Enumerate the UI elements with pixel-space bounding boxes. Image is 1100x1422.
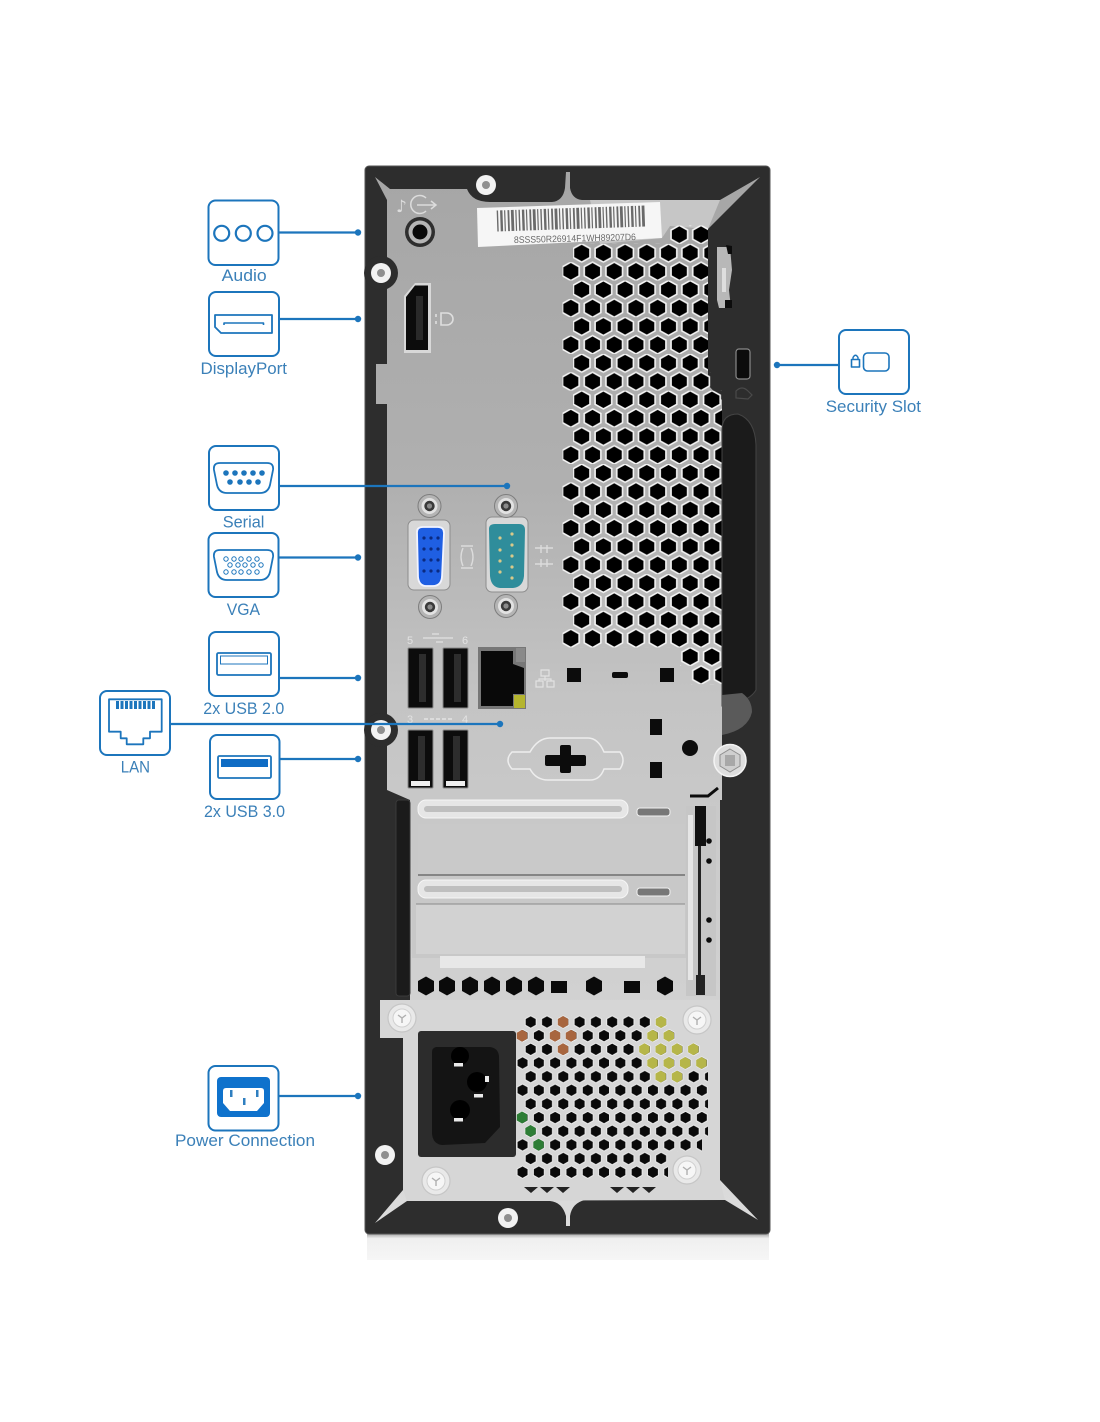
USB number marks — [407, 634, 468, 726]
dot: Serial — [504, 483, 510, 489]
serial marking — [535, 545, 553, 567]
slot side rail — [686, 788, 718, 996]
bottom tabs — [524, 1187, 656, 1193]
callout: USB 2.0 — [203, 632, 361, 718]
label: Serial: Serial — [223, 512, 264, 532]
dot: Power — [355, 1093, 361, 1099]
icon box: Power — [208, 1066, 278, 1130]
connector line: USB 2.0 — [279, 677, 358, 679]
security lock slot — [736, 349, 750, 379]
DisplayPort port — [404, 283, 431, 353]
LAN port — [478, 647, 526, 709]
connector line: VGA — [279, 556, 358, 559]
icon: lock and slot — [852, 353, 889, 371]
connector line: Security — [777, 364, 839, 366]
power supply screws — [388, 1004, 711, 1195]
power supply plate — [380, 1000, 725, 1201]
icon box: Security — [839, 330, 909, 394]
callout: VGA — [208, 533, 361, 619]
dot: USB 3.0 — [355, 756, 361, 762]
callout: Audio — [208, 200, 361, 285]
icon: three audio jacks — [214, 226, 272, 241]
icon box: DisplayPort — [209, 292, 279, 356]
icon: USB 2.0 connector — [217, 653, 271, 675]
connector line: USB 3.0 — [279, 758, 358, 760]
callout: USB 3.0 — [204, 735, 361, 821]
connector line: Serial — [279, 485, 507, 487]
callout: DisplayPort — [200, 292, 361, 378]
callout: LAN — [100, 691, 503, 777]
floor shadow under computer — [367, 1233, 769, 1260]
label: DisplayPort: DisplayPort — [200, 359, 287, 378]
right side handle recess — [722, 414, 756, 706]
metal back plate — [375, 172, 760, 1226]
audio marking: ♪ — [396, 197, 407, 217]
label: 2x USB 3.0: 2x USB 3.0 — [204, 802, 285, 821]
label: VGA: VGA — [227, 600, 261, 619]
USB 3.0 ports — [408, 730, 468, 788]
LAN marking — [536, 670, 554, 687]
dot: Security — [774, 362, 780, 368]
icon box: USB 2.0 — [209, 632, 279, 696]
expansion slots — [412, 798, 692, 968]
icon box: LAN — [100, 691, 170, 755]
serial port — [486, 494, 528, 618]
USB number marks: 6 — [462, 635, 468, 647]
DisplayPort marking — [436, 313, 453, 325]
USB 2.0 ports — [408, 648, 468, 708]
VGA port — [408, 494, 450, 618]
connector line: Power — [279, 1095, 358, 1097]
top right latch — [717, 245, 732, 308]
power supply grille — [516, 1015, 708, 1179]
left lower slot recess — [396, 800, 410, 996]
computer rear photo illustration — [364, 166, 770, 1234]
icon box: VGA — [208, 533, 278, 597]
icon: VGA connector — [214, 550, 273, 580]
connector line: Audio — [279, 231, 358, 234]
dot: DisplayPort — [355, 316, 361, 322]
USB number marks: 4 — [462, 714, 468, 726]
hex thumbscrew — [714, 744, 746, 776]
dot: LAN — [497, 721, 503, 727]
screw rings — [371, 175, 518, 1228]
dot: VGA — [355, 554, 361, 561]
icon box: Serial — [209, 446, 279, 510]
upper ventilation grille — [562, 226, 722, 684]
icon box: Audio — [208, 200, 278, 265]
light patch above grille — [590, 200, 720, 244]
audio jack — [405, 217, 435, 247]
label: Audio: Audio — [222, 266, 267, 285]
plate holes — [567, 668, 698, 778]
icon: USB 3.0 connector — [218, 756, 271, 778]
label: Security Slot: Security Slot — [826, 397, 921, 416]
dot: Audio — [355, 229, 361, 236]
handle bottom highlight — [722, 693, 752, 735]
label: LAN: LAN — [121, 758, 150, 777]
callout: Security Slot — [774, 330, 921, 416]
audio marking — [396, 195, 436, 217]
icon: serial connector — [214, 463, 273, 493]
dot: USB 2.0 — [355, 675, 361, 681]
mounting bumps — [364, 256, 398, 747]
label: Power Connection: Power Connection — [175, 1131, 315, 1150]
VGA marking — [461, 546, 473, 568]
icon: power socket — [217, 1077, 270, 1117]
connector line: DisplayPort — [279, 318, 358, 320]
callout: Power Connection — [175, 1066, 361, 1150]
USB number marks: 5 — [407, 635, 413, 647]
icon box: USB 3.0 — [210, 735, 280, 799]
icon: DisplayPort connector — [215, 315, 272, 333]
connector line: LAN — [170, 723, 500, 725]
cross-shaped knockout — [508, 738, 623, 780]
lock mark — [736, 388, 752, 399]
chassis — [365, 166, 770, 1234]
lower vent holes — [418, 976, 673, 996]
icon: Ethernet connector — [109, 699, 162, 744]
label: 2x USB 2.0: 2x USB 2.0 — [203, 699, 284, 718]
callout: Serial — [209, 446, 510, 532]
USB number marks: 3 — [407, 714, 413, 726]
AC power socket — [418, 1031, 516, 1157]
barcode label: 8SSS50R26914F1WH89207D6 — [514, 231, 636, 245]
barcode label — [477, 202, 662, 247]
